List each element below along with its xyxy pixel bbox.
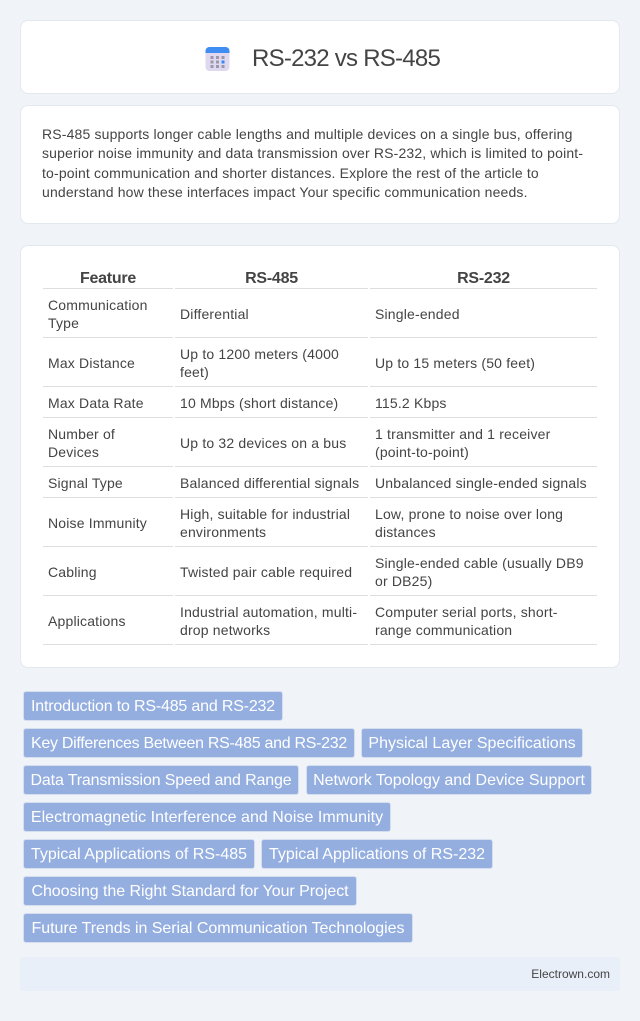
chip: applications rs-485: Typical Applications of RS-485 <box>31 846 247 863</box>
footer: Electrown.com <box>531 967 610 981</box>
row: cabling: Twisted pair cable required <box>180 564 352 580</box>
row: cabling: Single-ended cable (usually DB9 <box>375 555 584 571</box>
row: max data rate: 10 Mbps (short distance) <box>180 395 338 411</box>
chip: future trends <box>23 913 413 943</box>
row: noise immunity: Noise Immunity <box>48 515 147 531</box>
chip: choosing the standard <box>23 876 357 906</box>
chip: applications rs-485 <box>23 839 255 869</box>
topic chips <box>23 691 592 943</box>
intro text: to-point communication and shorter distances. Explore the rest of the article to <box>42 165 539 181</box>
row: applications: Computer serial ports, short- <box>375 604 558 620</box>
row: noise immunity: High, suitable for industrial <box>180 506 350 522</box>
row: noise immunity: distances <box>375 524 436 540</box>
chip: electromagnetic interference <box>23 802 391 832</box>
title: RS-232 vs RS-485 <box>252 45 440 72</box>
intro text: superior noise immunity and data transmission over RS-232, which is limited to point- <box>42 145 583 161</box>
row: max distance: feet) <box>180 364 209 380</box>
intro text <box>42 126 583 200</box>
row: applications <box>48 604 558 638</box>
row: max distance: Up to 15 meters (50 feet) <box>375 355 535 371</box>
row: signal type <box>48 475 587 491</box>
row: signal type: Signal Type <box>48 475 123 491</box>
row: number of devices: (point-to-point) <box>375 444 469 460</box>
table header: RS-232 <box>457 270 510 287</box>
panel: intro <box>20 105 620 224</box>
row: applications: range communication <box>375 622 512 638</box>
row: max distance <box>48 346 535 380</box>
row: max distance: Max Distance <box>48 355 135 371</box>
row: applications: Industrial automation, multi- <box>180 604 357 620</box>
row: cabling: Cabling <box>48 564 97 580</box>
chip: applications rs-232 <box>261 839 493 869</box>
chip: future trends: Future Trends in Serial Communication Technologies <box>31 920 404 937</box>
chip: physical layer <box>361 728 583 758</box>
row: communication type: Communication <box>48 297 148 313</box>
row: number of devices: Number of <box>48 426 115 442</box>
row: max data rate: 115.2 Kbps <box>375 395 447 411</box>
row: applications: drop networks <box>180 622 270 638</box>
row: communication type: Type <box>48 315 79 331</box>
table header <box>80 270 510 287</box>
row: signal type: Unbalanced single-ended signals <box>375 475 587 491</box>
row: communication type <box>48 297 460 331</box>
chip: applications rs-232: Typical Applications of RS-232 <box>269 846 485 863</box>
chip: introduction: Introduction to RS-485 and RS-232 <box>31 698 275 715</box>
table rules <box>43 288 597 645</box>
chip: network topology <box>306 765 592 795</box>
row: cabling <box>48 555 584 589</box>
icon: calendar <box>206 47 230 71</box>
row: number of devices <box>48 426 550 460</box>
row: applications: Applications <box>48 613 126 629</box>
chip: electromagnetic interference: Electromagnetic Interference and Noise Immunity <box>31 809 383 826</box>
row: number of devices: Devices <box>48 444 99 460</box>
row: number of devices: Up to 32 devices on a bus <box>180 435 346 451</box>
row: cabling: or DB25) <box>375 573 432 589</box>
footer <box>20 957 620 991</box>
row: max data rate: Max Data Rate <box>48 395 144 411</box>
chip: data transmission <box>23 765 299 795</box>
row: max distance: Up to 1200 meters (4000 <box>180 346 339 362</box>
panel: header <box>20 20 620 94</box>
row: noise immunity <box>48 506 563 540</box>
intro text: understand how these interfaces impact Your specific communication needs. <box>42 184 528 200</box>
table header: Feature <box>80 270 136 287</box>
row: max data rate <box>48 395 447 411</box>
chip: key differences <box>23 728 355 758</box>
chip: data transmission: Data Transmission Speed and Range <box>30 772 292 789</box>
panel: comparison table <box>20 245 620 668</box>
table header: RS-485 <box>245 270 298 287</box>
row: number of devices: 1 transmitter and 1 receiver <box>375 426 550 442</box>
row: noise immunity: Low, prone to noise over long <box>375 506 563 522</box>
row: signal type: Balanced differential signals <box>180 475 359 491</box>
chip: network topology: Network Topology and Device Support <box>313 772 585 789</box>
chip: choosing the standard: Choosing the Right Standard for Your Project <box>31 883 349 900</box>
row: noise immunity: environments <box>180 524 266 540</box>
row: communication type: Differential <box>180 306 249 322</box>
intro text: RS-485 supports longer cable lengths and multiple devices on a single bus, offering <box>42 126 573 142</box>
row: communication type: Single-ended <box>375 306 460 322</box>
chip: introduction <box>23 691 283 721</box>
chip: physical layer: Physical Layer Specifications <box>368 735 576 752</box>
chip: key differences: Key Differences Between RS-485 and RS-232 <box>31 735 347 752</box>
